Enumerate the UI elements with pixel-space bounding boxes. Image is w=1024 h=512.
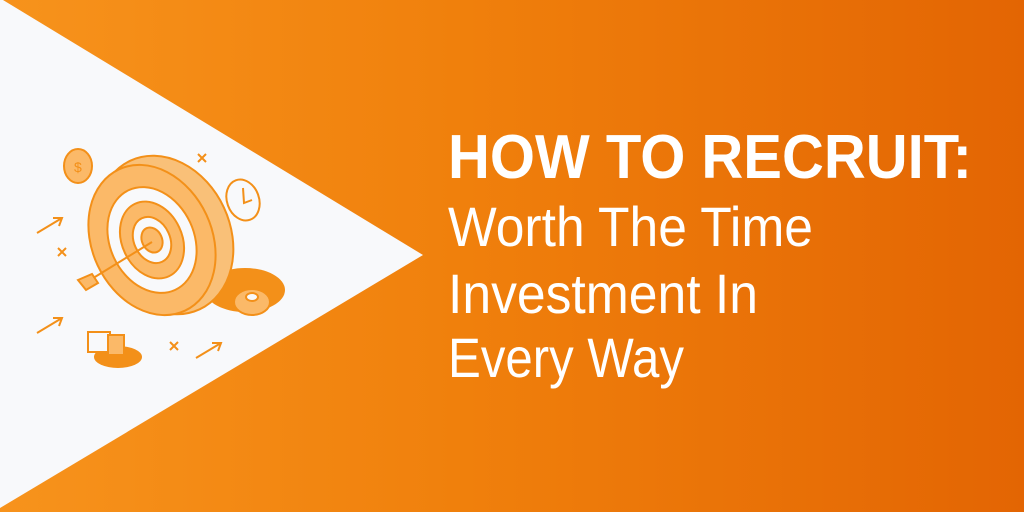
pie chart (88, 332, 142, 368)
arrow in target (78, 242, 152, 290)
target body (65, 133, 259, 337)
x marks (58, 154, 206, 350)
illustration: target with arrow (37, 133, 285, 368)
white triangle panel (0, 0, 423, 508)
coin: $ (74, 159, 82, 175)
target shadow (205, 268, 285, 312)
subtitle line 3: Every Way (448, 326, 684, 389)
coin (64, 149, 92, 183)
subtitle line 1: Worth The Time (448, 195, 813, 258)
gear (234, 289, 270, 315)
subtitle line 2: Investment In (448, 262, 758, 325)
heading: HOW TO RECRUIT: (448, 123, 972, 192)
small arrows (37, 218, 221, 358)
clock (221, 175, 265, 225)
